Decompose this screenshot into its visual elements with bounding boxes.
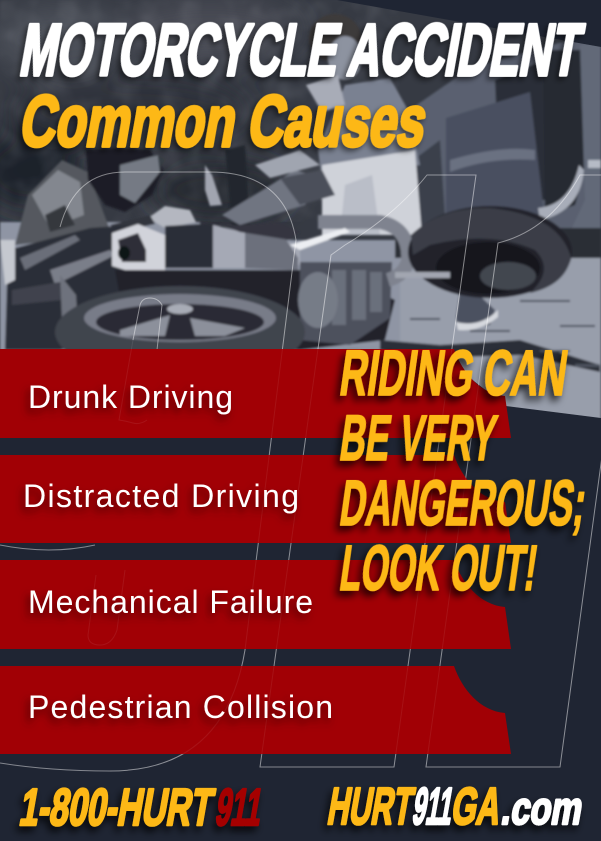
- faint watermark over bars: [88, 175, 601, 771]
- outlined 911 watermark: [0, 172, 601, 771]
- phone number: 1-800-HURT: [16, 779, 218, 837]
- label: drunk driving: Drunk Driving: [28, 379, 233, 415]
- bar: pedestrian collision: [0, 666, 511, 754]
- label: distracted driving: Distracted Driving: [23, 478, 299, 514]
- website: [324, 778, 587, 836]
- person: [311, 14, 360, 60]
- rider: [15, 160, 112, 245]
- bar: drunk driving: [0, 349, 511, 438]
- frame under: [115, 270, 395, 350]
- website: GA: [448, 778, 506, 836]
- engine: [300, 262, 392, 345]
- rear tyre: [408, 206, 572, 298]
- title line: common causes: Common Causes: [15, 81, 433, 162]
- exhaust: [112, 224, 165, 270]
- bike body: [4, 225, 124, 349]
- photo: crashed motorcycle: [0, 0, 601, 420]
- front tyre: [54, 285, 304, 349]
- bar: distracted driving: [0, 455, 511, 543]
- website: 911: [409, 778, 458, 836]
- title: [15, 9, 589, 162]
- label: mechanical failure: Mechanical Failure: [28, 584, 313, 620]
- red cause bars: [0, 349, 511, 754]
- bar: mechanical failure: [0, 560, 511, 649]
- car: [395, 40, 601, 232]
- cause labels: [23, 379, 333, 725]
- phone number: 911: [212, 779, 267, 837]
- bike fairing: [222, 170, 306, 226]
- label: pedestrian collision: Pedestrian Collision: [28, 689, 333, 725]
- website: HURT: [324, 778, 418, 836]
- handlebar: [205, 165, 222, 206]
- road: [0, 220, 402, 349]
- pipe: [318, 222, 408, 280]
- warning message: [336, 337, 591, 604]
